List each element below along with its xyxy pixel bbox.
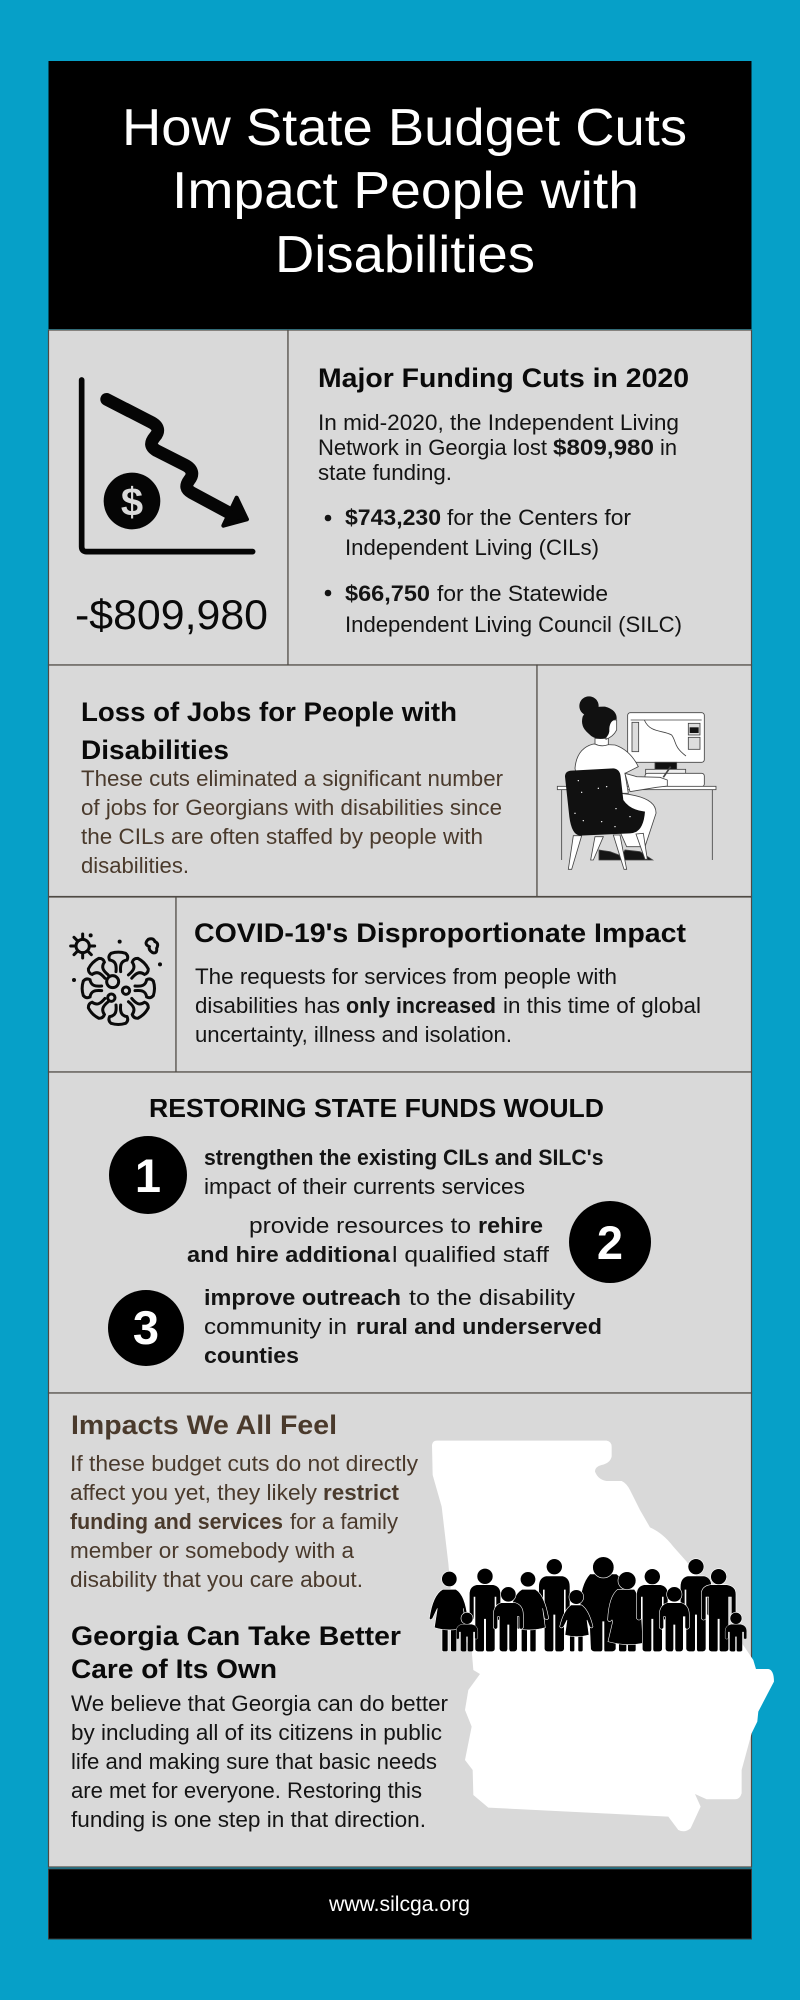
panel: impacts we all feel (48, 1393, 774, 1867)
item 3: community in (204, 1314, 347, 1339)
title banner: Disabilities (275, 226, 535, 284)
body text: These cuts eliminated a significant number (81, 766, 503, 791)
icon: virus (71, 933, 162, 1024)
panel: illustration of person at desk (537, 665, 752, 896)
item 1: impact of their currents services (204, 1174, 525, 1199)
body text: impacts: restrict (323, 1480, 400, 1505)
heading: RESTORING STATE FUNDS WOULD (149, 1093, 604, 1123)
body text: Georgia: funding is one step in that direction. (71, 1807, 426, 1832)
body text: Georgia: by including all of its citizens in public (71, 1720, 442, 1745)
bullet list: Independent Living (CILs) (345, 535, 599, 560)
heading: Georgia can do better (71, 1621, 402, 1684)
icon: group of people (429, 1557, 747, 1652)
footer (48, 1869, 752, 1939)
body text: Georgia: life and making sure that basic needs (71, 1749, 437, 1774)
heading: Georgia can do better: Georgia Can Take Better (71, 1621, 402, 1651)
item 3: 3 (133, 1301, 159, 1354)
body text: Georgia: are met for everyone. Restoring this (71, 1778, 422, 1803)
body text: in this time of global (503, 993, 701, 1018)
icon: person at computer (557, 696, 716, 869)
item 2: provide resources to (249, 1213, 471, 1238)
title banner: How State Budget Cuts (122, 99, 687, 157)
bullet list: $743,230 (345, 505, 441, 530)
title banner: Impact People with (172, 162, 639, 220)
body text: Georgia (71, 1691, 448, 1832)
body text: disabilities. (81, 853, 189, 878)
body text: impacts: If these budget cuts do not directly (70, 1451, 418, 1476)
bullet list: Independent Living Council (SILC) (345, 612, 682, 637)
body text: disabilities has (195, 993, 340, 1018)
heading (81, 697, 457, 765)
body text: only increased (346, 993, 496, 1018)
map of Georgia (432, 1441, 774, 1831)
panel: COVID-19 impact (176, 897, 752, 1072)
panel: restoring state funds (48, 1072, 752, 1393)
item 2: and hire additiona (187, 1242, 391, 1267)
body text: The requests for services from people with (195, 964, 617, 989)
body text: impacts: member or somebody with a (70, 1538, 355, 1563)
panel: funding cut figure (48, 330, 288, 665)
item 1: strengthen the existing CILs and SILC's (204, 1145, 604, 1170)
intro text (318, 410, 679, 485)
title banner (48, 61, 752, 329)
body text (195, 964, 701, 1047)
item 1 (109, 1136, 604, 1214)
bullet list: for the Centers for (447, 505, 631, 530)
bullet list: for the Statewide (437, 581, 608, 606)
bullet list: $66,750 (345, 581, 430, 606)
body text: the CILs are often staffed by people with (81, 824, 483, 849)
intro text: state funding. (318, 460, 452, 485)
body text: impacts: for a family (290, 1509, 398, 1534)
body text: uncertainty, illness and isolation. (195, 1022, 512, 1047)
intro text: $809,980 (553, 435, 654, 460)
body text: of jobs for Georgians with disabilities since (81, 795, 502, 820)
intro text: in (660, 435, 677, 460)
panel: major funding cuts (288, 330, 752, 665)
body text: impacts (70, 1451, 418, 1592)
heading: COVID-19's Disproportionate Impact (194, 918, 686, 948)
heading: Loss of Jobs for People with (81, 697, 457, 727)
item 2: l qualified staff (392, 1242, 550, 1267)
item 2: rehire (478, 1213, 543, 1238)
item 3: to the disability (409, 1285, 575, 1310)
footer: www.silcga.org (328, 1893, 470, 1916)
item 3 (108, 1285, 602, 1368)
item 1: 1 (135, 1149, 161, 1202)
body text: impacts: affect you yet, they likely (70, 1480, 317, 1505)
bullet list (325, 505, 682, 637)
item 3: improve outreach (204, 1285, 401, 1310)
intro text: Network in Georgia lost (318, 435, 547, 460)
body text: impacts: disability that you care about. (70, 1567, 363, 1592)
heading: Georgia can do better: Care of Its Own (71, 1654, 277, 1684)
body text: impacts: funding and services (70, 1509, 283, 1534)
heading: Disabilities (81, 735, 229, 765)
heading: Major Funding Cuts in 2020 (318, 363, 689, 393)
item 3: rural and underserved (356, 1314, 602, 1339)
item 2: 2 (597, 1216, 623, 1269)
panel: loss of jobs (48, 665, 537, 896)
body text (81, 766, 503, 878)
icon: falling chart with dollar (82, 380, 253, 552)
amount lost: -$809,980 (75, 591, 268, 638)
item 2 (187, 1201, 651, 1283)
heading: impacts: Impacts We All Feel (71, 1410, 337, 1440)
body text: Georgia: We believe that Georgia can do better (71, 1691, 448, 1716)
icon: falling chart with dollar: $ (121, 480, 143, 524)
panel: virus icon (48, 897, 176, 1072)
intro text: In mid-2020, the Independent Living (318, 410, 679, 435)
item 3: counties (204, 1343, 299, 1368)
